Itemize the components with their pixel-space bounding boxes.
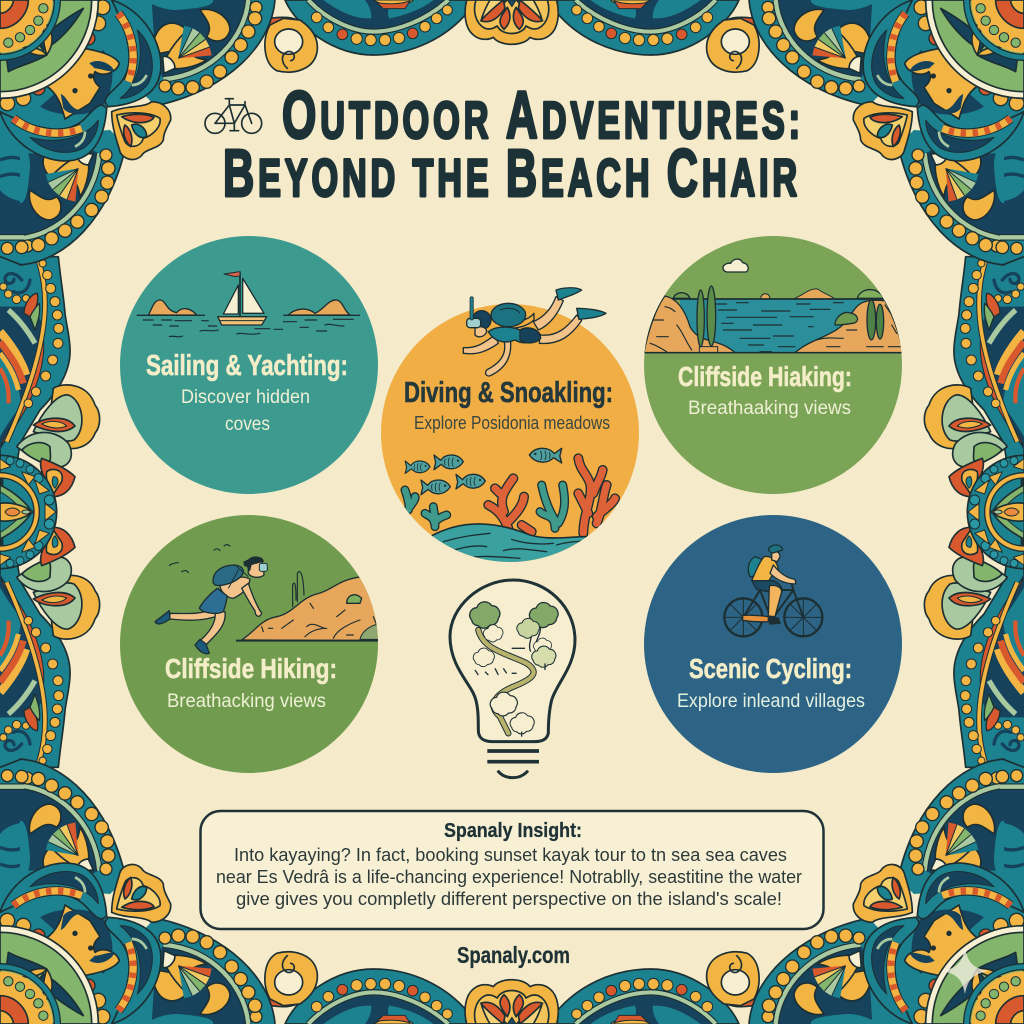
panel: cliffside hiaking	[643, 236, 903, 494]
title: BEYOND THE BEACH CHAIR	[223, 136, 801, 211]
footer url: Spanaly.com	[457, 942, 570, 968]
panel: sailing and yachting: Discover hidden	[181, 387, 310, 408]
icon: lightbulb with island trees	[450, 580, 575, 778]
title: OUTDOOR ADVENTURES:	[282, 78, 804, 153]
text: cliffside hiking: Cliffside Hiking:	[165, 653, 337, 684]
text: sailing: Sailing & Yachting:	[146, 350, 348, 382]
panel: diving and snorkeling: Explore Posidonia meadows	[414, 413, 610, 433]
text: diving: Diving & Snoakling:	[404, 377, 613, 409]
icon: sparkle	[942, 948, 988, 994]
text: scenic cycling: Scenic Cycling:	[689, 653, 852, 684]
illustration: reef and fish	[405, 448, 615, 567]
icon: bicycle	[205, 99, 262, 133]
callout body	[216, 844, 802, 909]
callout body: near Es Vedrâ is a life-chancing experience! Notrablly, seastitine the water	[216, 866, 802, 887]
panel: cliffside hiking	[120, 515, 383, 773]
panel: cliffside hiking: Breathacking views	[167, 691, 326, 712]
panel: diving and snorkeling	[381, 288, 639, 567]
illustration: hiker and cliff	[155, 545, 383, 654]
callout body: give gives you completly different perspective on the island's scale!	[236, 888, 782, 909]
illustration: diver	[463, 288, 606, 376]
callout body: Into kayaying? In fact, booking sunset kayak tour to tn sea sea caves	[234, 844, 787, 865]
illustration: sailboat and islands	[137, 272, 360, 337]
callout: spanaly insight	[200, 811, 824, 929]
panel: scenic cycling	[644, 515, 902, 773]
panel: scenic cycling: Explore inleand villages	[677, 691, 865, 712]
illustration: cyclist	[724, 545, 822, 636]
panel: sailing and yachting	[120, 236, 378, 494]
text: cliffside hiaking: Cliffside Hiaking:	[678, 361, 852, 392]
title	[223, 78, 804, 211]
panel: sailing and yachting: coves	[225, 414, 270, 435]
panel: cliffside hiaking: Breathaaking views	[688, 398, 851, 419]
callout heading: Spanaly Insight:	[444, 820, 582, 842]
illustration: coastal cliffs	[643, 259, 903, 353]
